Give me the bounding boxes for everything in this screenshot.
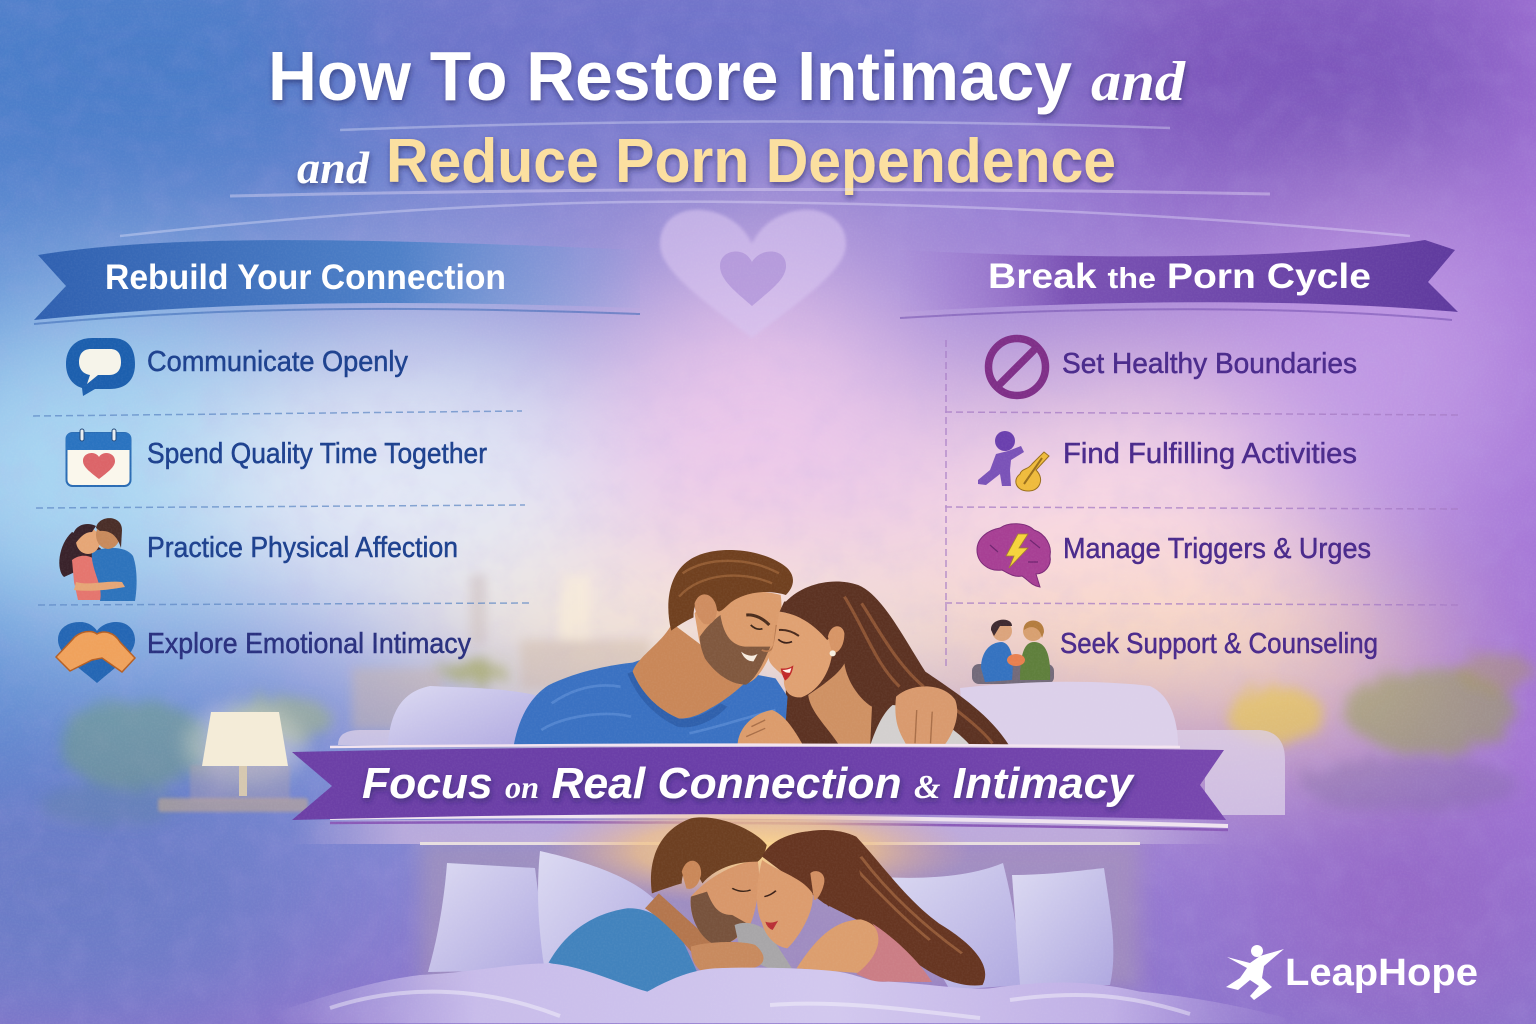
icon: two people counseling: [972, 620, 1054, 684]
item: practice physical affection: Practice Physical Affection: [147, 532, 458, 564]
logo: LeapHope: LeapHope: [1285, 952, 1478, 994]
icon: speech bubble: [66, 338, 135, 396]
title: Reduce Porn Dependence: [386, 127, 1116, 196]
icon: running figure: [1226, 945, 1284, 1000]
ribbon: break the porn cycle: [900, 240, 1458, 320]
banner: focus on real connection: [292, 745, 1226, 820]
icon: heart with holding hands: [56, 622, 135, 683]
item: find fulfilling activities: Find Fulfilling Activities: [1063, 438, 1357, 470]
icon: brain with lightning: [977, 524, 1050, 587]
ribbon: break the porn cycle: Break the Porn Cycle: [988, 257, 1371, 296]
title: [268, 37, 1186, 196]
item: set healthy boundaries: Set Healthy Boundaries: [1062, 348, 1357, 380]
title swoosh dividers: [120, 121, 1410, 236]
title: How To Restore Intimacy: [268, 37, 1072, 115]
item: manage triggers and urges: Manage Triggers & Urges: [1063, 533, 1371, 565]
lamp and nightstand: [158, 705, 308, 812]
title: and: [297, 142, 370, 193]
icon: person with guitar: [978, 431, 1049, 491]
icon: calendar with heart: [66, 429, 131, 486]
item: spend quality time together: Spend Quality Time Together: [147, 438, 487, 470]
sofa: [338, 682, 1285, 815]
couple figures: [273, 817, 1292, 1023]
icon: embracing couple: [59, 518, 137, 601]
panel: rebuild your connection: [33, 240, 640, 683]
logo: LeapHope: [1226, 945, 1478, 1000]
title: and: [1091, 51, 1186, 113]
ribbon: rebuild your connection: Rebuild Your Connection: [105, 258, 506, 297]
headboard and glow: [290, 795, 1230, 990]
ribbon: rebuild your connection: [34, 240, 640, 324]
duvet folds: [330, 992, 1190, 1018]
icon: prohibition sign: [988, 338, 1046, 396]
item: communicate openly: Communicate Openly: [147, 346, 408, 378]
item: explore emotional intimacy: Explore Emotional Intimacy: [147, 628, 471, 660]
panel: break the porn cycle: [900, 240, 1460, 684]
icon: large central heart: [660, 210, 846, 338]
item: seek support and counseling: Seek Support & Counseling: [1060, 628, 1378, 660]
pillows: [428, 851, 1113, 1000]
illustration: couple on sofa: [514, 550, 1009, 745]
illustration: couple in bed: [273, 795, 1292, 1023]
banner: focus on real connection: Focus on Real Connection & Intimacy: [362, 759, 1136, 808]
duvet: [273, 963, 1292, 1023]
background room: windows, shelves and foliage: [40, 575, 1533, 827]
